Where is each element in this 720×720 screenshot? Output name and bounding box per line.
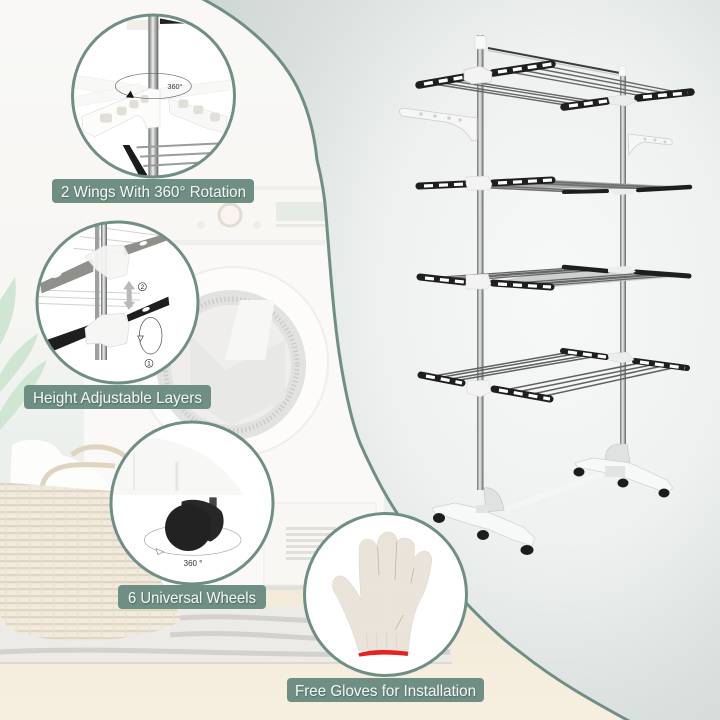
floor bbox=[0, 588, 640, 720]
shelf 1 bbox=[419, 64, 691, 107]
label: Free Gloves for Installation: Free Gloves for Installation bbox=[295, 683, 476, 700]
360 degree label: 360 ° bbox=[184, 559, 202, 568]
icon: work glove bbox=[333, 532, 432, 657]
callout circle: gloves bbox=[304, 514, 466, 676]
360 label: 360° bbox=[167, 82, 183, 91]
label: 6 Universal Wheels bbox=[118, 585, 266, 609]
basket bbox=[0, 447, 181, 641]
faded wings bbox=[75, 75, 230, 107]
shelf 2 bbox=[419, 176, 692, 195]
rear base with wheels bbox=[574, 444, 673, 498]
callout circle: 360 degree wings bbox=[72, 15, 234, 178]
plant leaves bbox=[0, 277, 47, 430]
rear cross bar on base bbox=[505, 474, 603, 510]
callout circle: height adjustable bbox=[37, 222, 198, 383]
callout circle: universal wheels bbox=[110, 422, 273, 584]
front base with wheels bbox=[432, 488, 535, 555]
panel: product background with curved edge bbox=[197, 0, 720, 720]
label: Height Adjustable Layers: Height Adjustable Layers bbox=[33, 390, 202, 407]
label: 2 Wings With 360 Rotation bbox=[52, 179, 254, 203]
shelf 3 bbox=[420, 266, 691, 289]
drying rack product bbox=[399, 35, 692, 555]
wing bright bbox=[168, 98, 227, 133]
step 1 marker: 1 bbox=[147, 361, 151, 368]
towel bbox=[10, 440, 112, 490]
washing machine bbox=[84, 175, 384, 590]
poles bbox=[475, 35, 626, 490]
side wings bbox=[399, 108, 672, 155]
rug bbox=[0, 606, 452, 664]
label: Free Gloves for Installation bbox=[287, 678, 484, 702]
label: 2 Wings With 360 Rotation: 2 Wings With 360° Rotation bbox=[61, 184, 246, 201]
step 2 marker: 2 bbox=[140, 284, 144, 291]
label: Height Adjustable Layers bbox=[24, 385, 211, 409]
shelf 4 bbox=[421, 351, 687, 399]
label: 6 Universal Wheels: 6 Universal Wheels bbox=[128, 590, 256, 607]
